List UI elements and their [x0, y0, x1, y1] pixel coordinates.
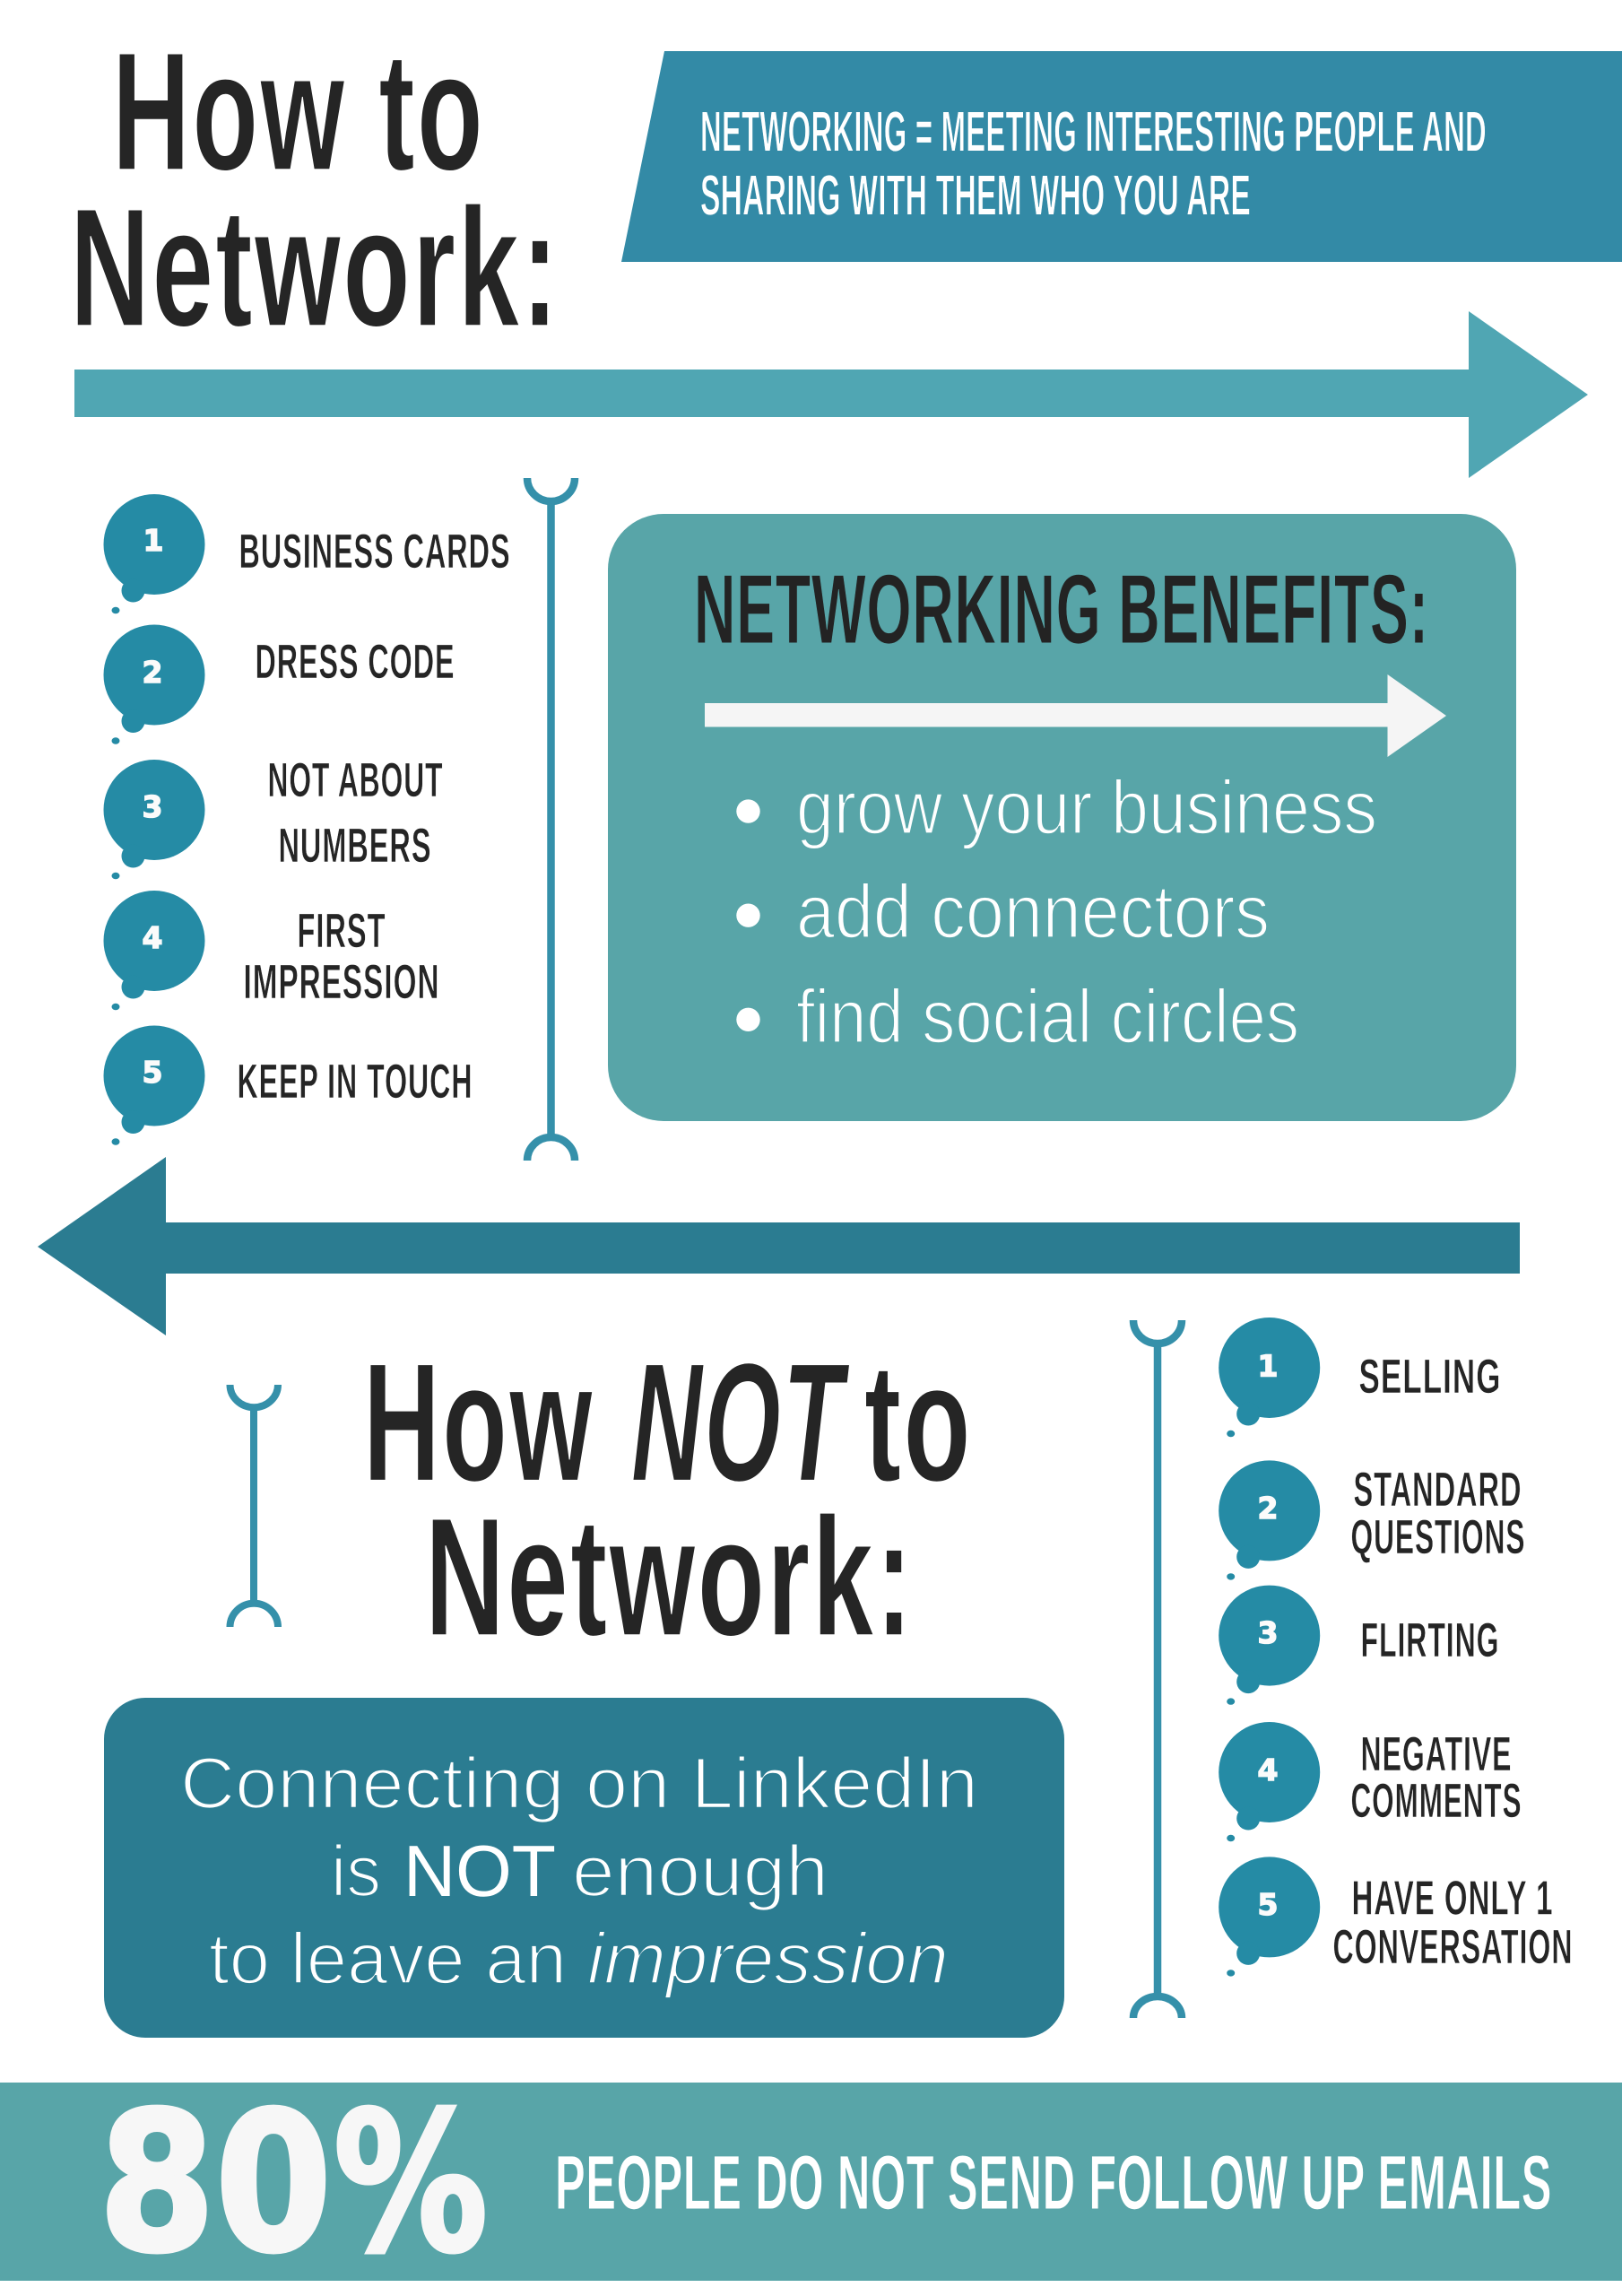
divider: small bracket beside heading	[230, 1385, 278, 1627]
banner: networking definition	[621, 51, 1622, 262]
tip 5: keep in touch: KEEP IN TOUCH	[237, 1055, 473, 1109]
stat: 80 percent: 80	[99, 2072, 332, 2295]
tip 2: dress code	[104, 624, 455, 744]
list: how to network tips	[104, 494, 511, 1145]
bullet list of benefits: find social circles	[796, 975, 1299, 1060]
tip 4: first impression	[104, 891, 439, 1010]
panel: linkedin note: impression	[587, 1919, 949, 2000]
tip 3: not about numbers: NUMBERS	[278, 819, 432, 873]
stat: 80 percent	[99, 2072, 488, 2295]
mistake 4: negative comments: 4	[1258, 1752, 1278, 1787]
bullet list of benefits: grow your business	[796, 766, 1377, 851]
mistake 1: selling	[1219, 1318, 1501, 1437]
mistake 1: selling: 1	[1258, 1349, 1278, 1384]
tip 1: business cards: BUSINESS CARDS	[239, 525, 511, 578]
bullet list of benefits: add connectors	[796, 870, 1270, 955]
tip 1: business cards: 1	[143, 523, 163, 558]
tip 5: keep in touch	[104, 1026, 473, 1145]
tip 4: first impression: 4	[143, 920, 162, 955]
mistake 2: standard questions: 2	[1258, 1491, 1278, 1526]
tip 3: not about numbers	[104, 753, 443, 879]
tip 3: not about numbers: NOT ABOUT	[267, 753, 443, 807]
footer band: follow up statistic	[0, 2072, 1622, 2295]
list: how not to network	[1219, 1318, 1573, 1977]
panel: linkedin note: is	[331, 1831, 381, 1912]
heading: How NOT to Network	[363, 1328, 973, 1671]
tip 2: dress code: DRESS CODE	[255, 635, 455, 689]
mistake 3: flirting: FLIRTING	[1361, 1613, 1499, 1667]
mistake 3: flirting: 3	[1258, 1615, 1278, 1650]
mistake 1: selling: SELLING	[1359, 1350, 1501, 1404]
tip 1: business cards	[104, 494, 511, 613]
mistake 3: flirting	[1219, 1586, 1499, 1705]
panel: linkedin note: Connecting on LinkedIn	[180, 1744, 978, 1824]
title: How to Network	[70, 17, 560, 361]
panel: linkedin note: enough	[572, 1831, 828, 1912]
divider: left list bracket	[527, 478, 575, 1161]
mistake 4: negative comments: NEGATIVE	[1361, 1727, 1512, 1781]
panel: linkedin note	[104, 1698, 1064, 2038]
panel: networking benefits	[608, 514, 1516, 1121]
heading: How NOT to Network: to	[864, 1328, 973, 1517]
title: How to Network: Network:	[70, 173, 560, 361]
panel: linkedin note: NOT	[403, 1831, 556, 1912]
title: How to Network: How to	[112, 17, 485, 205]
divider: right list bracket	[1133, 1320, 1182, 2018]
bullet list of benefits	[736, 766, 1377, 1060]
arrow: white arrow in panel	[705, 674, 1446, 757]
tip 2: dress code: 2	[143, 655, 162, 690]
stat: 80 percent: %	[334, 2072, 488, 2295]
mistake 4: negative comments	[1219, 1722, 1522, 1841]
heading: How NOT to Network: Network:	[425, 1483, 915, 1671]
arrow: right-pointing top arrow	[74, 311, 1588, 478]
mistake 5: have only 1 conversation	[1219, 1857, 1573, 1977]
tip 3: not about numbers: 3	[143, 789, 162, 824]
mistake 2: standard questions	[1219, 1460, 1526, 1580]
heading: How NOT to Network: NOT	[631, 1328, 850, 1517]
tip 4: first impression: IMPRESSION	[244, 955, 439, 1009]
tip 5: keep in touch: 5	[143, 1055, 162, 1090]
arrow: left-pointing middle arrow	[38, 1157, 1520, 1335]
heading: How NOT to Network: How	[363, 1328, 594, 1517]
mistake 5: have only 1 conversation: 5	[1258, 1887, 1278, 1922]
panel: linkedin note: to leave an	[209, 1919, 567, 2000]
tip 4: first impression: FIRST	[298, 904, 386, 958]
